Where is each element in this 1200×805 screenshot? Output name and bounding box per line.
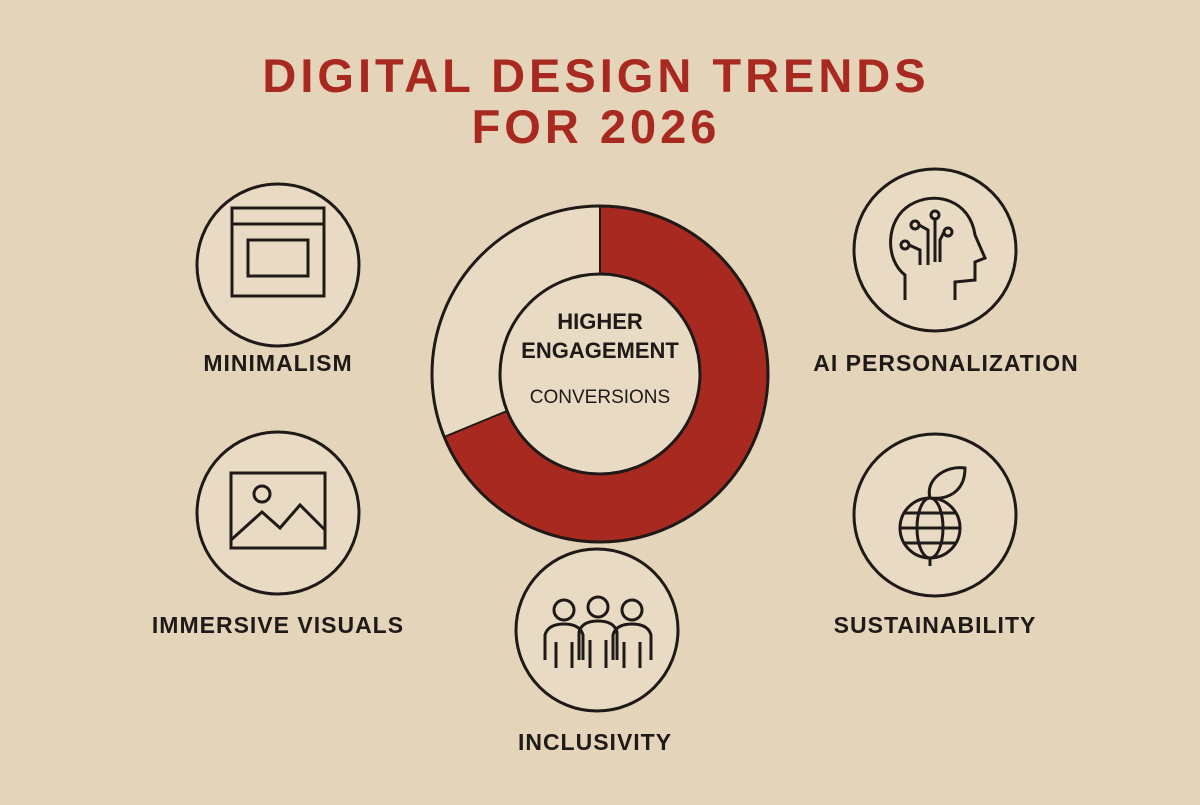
icon: AI personalization <box>854 169 1016 331</box>
donut chart <box>432 206 768 542</box>
donut center text: ENGAGEMENT <box>521 338 679 363</box>
icon: sustainability <box>854 434 1016 596</box>
label: AI personalization: AI PERSONALIZATION <box>813 350 1079 376</box>
title <box>262 49 930 153</box>
icon: inclusivity <box>516 549 678 711</box>
title: DIGITAL DESIGN TRENDS <box>262 49 930 102</box>
icon: immersive visuals <box>197 432 359 594</box>
label: immersive visuals: IMMERSIVE VISUALS <box>152 612 404 638</box>
icon: minimalism <box>197 184 359 346</box>
label: minimalism: MINIMALISM <box>203 350 353 376</box>
donut center text <box>521 309 679 408</box>
label: sustainability: SUSTAINABILITY <box>834 612 1036 638</box>
title: FOR 2026 <box>472 100 720 153</box>
label: inclusivity: INCLUSIVITY <box>518 729 672 755</box>
donut center text: CONVERSIONS <box>530 387 670 408</box>
donut center text: HIGHER <box>557 309 643 334</box>
